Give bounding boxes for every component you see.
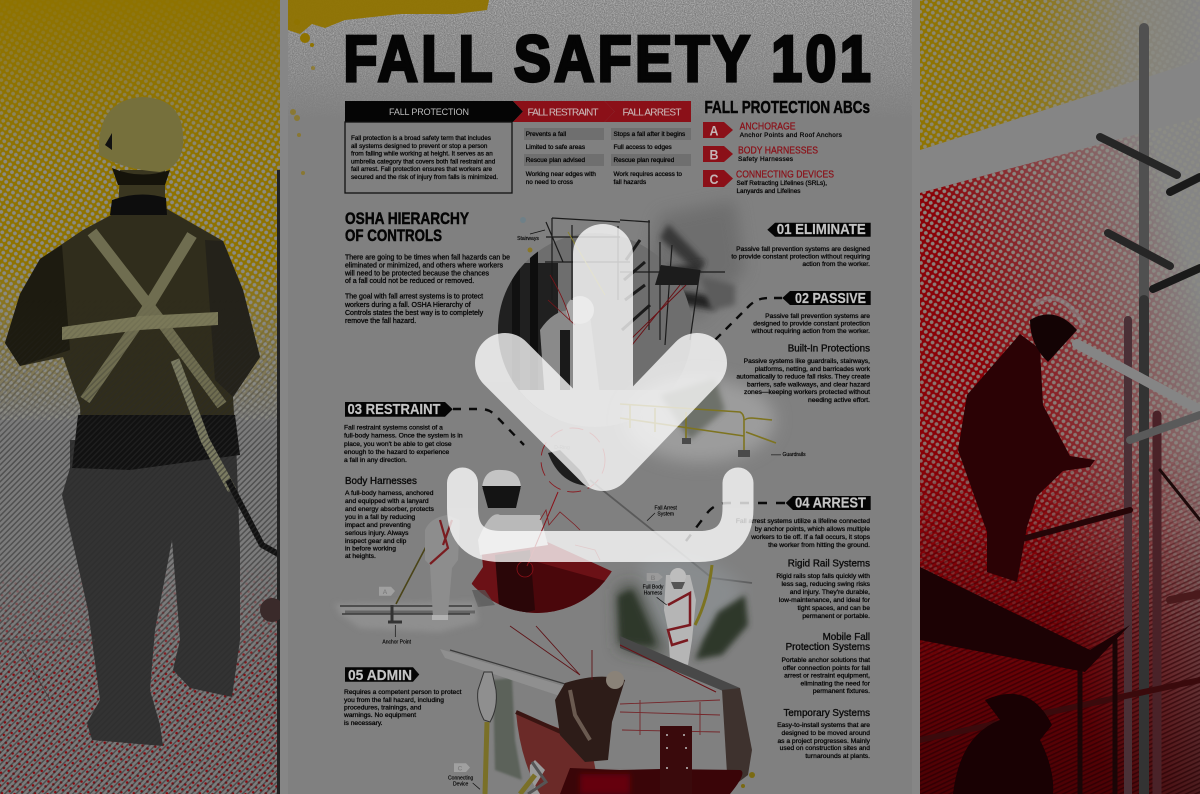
header: fall arrest column: Work requires access to xyxy=(614,171,682,178)
text: mobile fall protection systems: offer connection points for fall xyxy=(783,665,871,672)
header: fall protection definition: secured and the risk of injury from falls is minimized. xyxy=(351,174,498,181)
text: built-in protections: platforms, netting, and barricades work xyxy=(755,366,871,373)
item C connecting devices: CONNECTING DEVICES xyxy=(736,170,834,180)
header: fall protection definition: umbrella category that covers both fall restraint and xyxy=(351,158,496,165)
text: body harnesses: serious injury. Always xyxy=(345,530,409,537)
text: temporary systems: Easy-to-install systems that are xyxy=(777,722,870,729)
text: restraint description: Fall restraint systems consist of a xyxy=(344,424,443,432)
text: arrest description: Fall arrest systems utilize a lifeline connected xyxy=(736,518,870,525)
text: built-in protections: zones—keeping workers protected without xyxy=(744,389,870,396)
lower worker silhouette xyxy=(953,694,1053,794)
text: built-in protections: automatically to reduce fall risks. They create xyxy=(736,374,870,380)
text: rigid rail systems: permanent or portable. xyxy=(802,613,870,620)
scaffolding tubes xyxy=(920,28,1200,794)
item C connecting devices: Lanyards and Lifelines xyxy=(736,188,800,195)
text: OSHA introduction: Controls states the best way is to completely xyxy=(345,310,484,317)
item C connecting devices xyxy=(703,170,834,195)
beam and column xyxy=(620,636,740,696)
header: fall protection definition: Fall protection is a broad safety term that includes xyxy=(351,135,491,142)
text: built-in protections: Built-In Protections xyxy=(788,344,870,355)
text: mobile fall protection systems: arrest or restraint equipment, xyxy=(784,672,870,679)
text: body harnesses: impact and preventing xyxy=(345,522,411,529)
text: rigid rail systems: Rigid rails stop falls quickly with xyxy=(776,573,870,580)
text: body harnesses: A full-body harness, anchored xyxy=(345,490,434,497)
right photo panel: worker on scaffolding xyxy=(920,0,1200,794)
header: fall arrest column: fall hazards xyxy=(614,179,646,186)
illustration: steel beam and connecting device scene xyxy=(440,626,755,794)
text: arrest description: workers to tie off. If a fall occurs, it stops xyxy=(750,534,871,541)
heading: OSHA hierarchy of controls: OSHA HIERARCHY xyxy=(345,209,470,228)
text: temporary systems: turnarounds at plants. xyxy=(805,753,870,760)
text: OSHA introduction: workers during a fall. OSHA Hierarchy of xyxy=(344,302,471,309)
label: anchor point: Anchor Point xyxy=(382,639,412,645)
label: connecting device: Connecting xyxy=(448,775,474,781)
text: temporary systems: used on construction sites and xyxy=(780,745,870,752)
header: fall protection definition: FALL PROTECTION xyxy=(389,107,469,117)
photo circle xyxy=(498,234,692,408)
left photo panel: worker in harness on halftone background xyxy=(0,0,284,794)
text: arrest description: by anchor points, which allows multiple xyxy=(755,526,870,533)
left worker silhouette xyxy=(5,97,280,746)
text: mobile fall protection systems: Protection Systems xyxy=(786,642,870,653)
text: body harnesses: in before working xyxy=(345,546,396,552)
text: body harnesses: and equipped with a lanyard xyxy=(345,498,429,505)
header: fall restraint column xyxy=(513,101,614,186)
header: fall restraint column: Rescue plan advised xyxy=(526,157,585,164)
text: body harnesses: inspect gear and clip xyxy=(345,538,407,545)
text: rigid rail systems: tight spaces, and can be xyxy=(798,605,870,612)
header: fall restraint column: Working near edges with xyxy=(526,171,596,178)
text: built-in protections: needing active effort. xyxy=(808,397,870,404)
text: OSHA introduction: remove the fall hazard. xyxy=(345,318,416,325)
text: temporary systems: designed to be moved around xyxy=(782,730,870,737)
text: built-in protections: barriers, safe walkways, and clear hazard xyxy=(747,382,870,388)
text: temporary systems: as a project progresses. Mainly xyxy=(777,738,871,745)
text: body harnesses: at heights. xyxy=(345,553,376,560)
item A anchorage: Anchor Points and Roof Anchors xyxy=(740,132,842,139)
text: OSHA introduction: will need to be protected because the chances xyxy=(344,270,489,278)
text: body harnesses xyxy=(345,476,435,560)
label: fall arrest system: Fall Arrest xyxy=(654,505,678,511)
text: admin description: Requires a competent person to protect xyxy=(344,689,462,696)
illustration: guardrails xyxy=(620,378,776,462)
icon: download watermark xyxy=(462,254,738,546)
label: connecting device xyxy=(448,763,480,789)
header: fall restraint column: Limited to safe areas xyxy=(526,144,585,151)
label: connecting device: Device xyxy=(453,781,469,787)
fall arrest lifeline cable xyxy=(590,480,752,583)
text: body harnesses: Body Harnesses xyxy=(345,476,417,487)
header: fall arrest column: Stops a fall after it begins xyxy=(614,131,685,138)
heading: OSHA hierarchy of controls: OF CONTROLS xyxy=(345,226,442,245)
text: mobile fall protection systems: eliminating the need for xyxy=(800,680,871,687)
text: restraint description: enough to the hazard to experience xyxy=(344,449,450,456)
text: rigid rail systems xyxy=(776,559,871,620)
label: anchor point xyxy=(379,587,412,645)
header: fall protection definition xyxy=(345,101,523,193)
label: full body harness: B xyxy=(651,575,656,582)
text: temporary systems xyxy=(777,708,871,760)
label: full body harness xyxy=(643,573,667,605)
text: temporary systems: Temporary Systems xyxy=(783,708,870,719)
text: body harnesses: and energy absorber, protects xyxy=(345,506,435,513)
item B body harnesses xyxy=(703,146,818,163)
text: rigid rail systems: and injury. They're durable, xyxy=(790,589,870,596)
harness straps xyxy=(85,232,222,405)
label: guardrails: Guardrails xyxy=(782,452,806,458)
illustration: stairway scaffold and photo circle xyxy=(498,202,744,408)
text: OSHA introduction: There are going to be times when fall hazards can be xyxy=(345,254,510,262)
header: fall protection definition: all systems designed to prevent or stop a person xyxy=(351,143,488,150)
header: fall arrest column xyxy=(604,101,691,186)
text: built-in protections xyxy=(736,344,871,404)
text: admin description: warnings. No equipment xyxy=(343,712,416,719)
text: admin description: procedures, trainings, and xyxy=(344,704,422,711)
text: passive description: designed to provide constant protection xyxy=(753,320,870,328)
text: arrest description: the worker from hitting the ground. xyxy=(768,542,870,549)
tag: 01 eliminate: 01 ELIMINATE xyxy=(777,221,866,238)
text: body harnesses: you in a fall by reducing xyxy=(345,514,416,521)
header: fall arrest column: Full access to edges xyxy=(614,144,672,151)
text: mobile fall protection systems xyxy=(782,632,871,695)
dashed connector: restraint xyxy=(453,409,524,445)
ABCs heading: FALL PROTECTION ABCs xyxy=(704,97,870,117)
header: fall protection definition: from falling while working at height. It serves as an xyxy=(351,151,493,158)
illustration: D-ring detail and worker: D-Ring xyxy=(554,445,570,451)
text: restraint description: place, you won't be able to get close xyxy=(344,441,452,448)
text: built-in protections: Passive systems like guardrails, stairways, xyxy=(744,358,870,365)
item C connecting devices: C xyxy=(710,171,718,187)
label: fall arrest system xyxy=(647,505,678,521)
text: restraint description: a fall in any direction. xyxy=(344,457,407,464)
tag: 04 arrest: 04 ARREST xyxy=(795,494,866,511)
scaffold lines xyxy=(545,218,725,345)
yellow brush and splatter xyxy=(288,0,489,175)
text: mobile fall protection systems: Mobile Fall xyxy=(823,632,870,643)
text: eliminate description: Passive fall prevention systems are designed xyxy=(736,246,870,253)
item B body harnesses: BODY HARNESSES xyxy=(738,146,818,156)
label: anchor point: A xyxy=(383,589,388,596)
text: OSHA introduction: The goal with fall arrest systems is to protect xyxy=(345,294,483,301)
header: fall protection definition: fall arrest. Fall protection ensures that workers are xyxy=(351,166,493,173)
text: eliminate description: action from the worker. xyxy=(802,261,870,268)
dashed connector: arrest xyxy=(686,503,785,541)
text: passive description: Passive fall prevention systems are xyxy=(765,313,870,320)
item A anchorage xyxy=(703,122,842,139)
dashed connector: passive xyxy=(715,298,782,340)
label: guardrails xyxy=(771,452,806,458)
text: rigid rail systems: less sag, reducing swing risks xyxy=(782,581,871,588)
text: rigid rail systems: Rigid Rail Systems xyxy=(788,559,870,570)
heading: OSHA hierarchy of controls xyxy=(345,209,470,245)
header: fall arrest column: FALL ARREST xyxy=(622,108,682,118)
poster background xyxy=(280,0,920,794)
header: fall restraint column: Prevents a fall xyxy=(526,131,566,138)
header: fall restraint column: no need to cross xyxy=(526,179,573,186)
tag: 05 admin: 05 ADMIN xyxy=(348,667,412,684)
label: connecting device: C xyxy=(458,766,463,772)
text: admin description: is necessary. xyxy=(344,720,383,727)
text: OSHA introduction: eliminated or minimized, and others where workers xyxy=(345,262,503,270)
header: fall restraint column: FALL RESTRAINT xyxy=(528,108,598,118)
text: admin description: you from the fall hazard, including xyxy=(344,697,444,704)
text: rigid rail systems: low-maintenance, and ideal for xyxy=(779,597,871,604)
illustration: full body harness worker with trees xyxy=(618,554,748,665)
item B body harnesses: B xyxy=(710,146,718,162)
text: mobile fall protection systems: Portable anchor solutions that xyxy=(782,657,870,664)
text: OSHA introduction: of a fall could not be reduced or removed. xyxy=(345,278,474,285)
label: stairways: Stairways xyxy=(517,236,539,242)
red plate and floor xyxy=(560,768,742,794)
item A anchorage: A xyxy=(710,122,718,138)
title: FALL SAFETY 101 xyxy=(344,23,871,95)
illustration: worker tied to anchor point xyxy=(335,515,478,632)
tag: 02 passive: 02 PASSIVE xyxy=(795,290,866,307)
text: passive description: without requiring action from the worker. xyxy=(750,328,870,335)
scaffold platform xyxy=(920,567,1130,672)
label: full body harness: Harness xyxy=(644,591,663,597)
tag: 03 restraint: 03 RESTRAINT xyxy=(348,401,440,418)
text: mobile fall protection systems: permanent fixtures. xyxy=(813,688,870,695)
item B body harnesses: Safety Harnesses xyxy=(738,156,793,163)
header: fall arrest column: Rescue plan required xyxy=(614,157,675,164)
label: fall arrest system: System xyxy=(657,512,674,518)
label: full body harness: Full Body xyxy=(643,584,664,590)
panel: fall protection ABCs xyxy=(703,97,870,195)
text: restraint description: full-body harness. Once the system is in xyxy=(344,432,463,440)
text: eliminate description: to provide constant protection without requiring xyxy=(731,254,870,260)
illustration: D-ring detail and worker xyxy=(472,428,612,613)
item C connecting devices: Self Retracting Lifelines (SRLs), xyxy=(736,180,827,187)
item A anchorage: ANCHORAGE xyxy=(740,122,796,132)
right worker silhouette xyxy=(958,298,1095,582)
label: stairways xyxy=(517,230,545,242)
